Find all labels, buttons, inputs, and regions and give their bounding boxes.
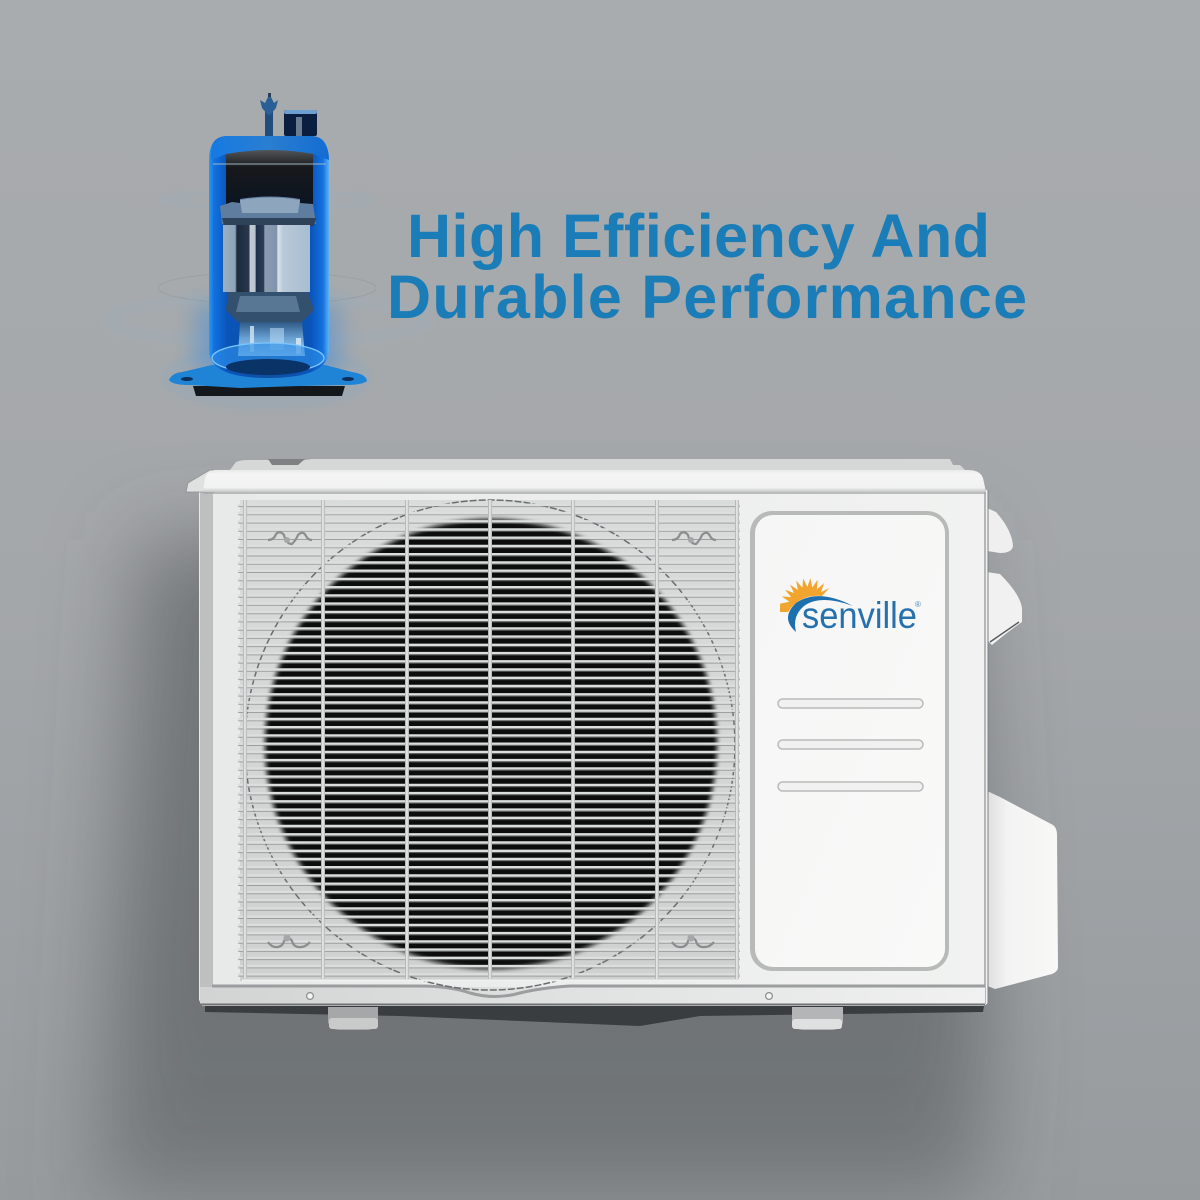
horizontal wires shading <box>238 507 740 976</box>
side bumps <box>987 508 1022 645</box>
lower rail <box>200 986 985 1004</box>
logo registered mark: ® <box>915 600 921 609</box>
service panel <box>750 511 949 971</box>
louvers <box>778 699 923 791</box>
fan grille <box>238 500 740 990</box>
compressor glow <box>107 192 427 403</box>
top cap band <box>211 136 329 160</box>
logo sun <box>780 578 829 612</box>
underside <box>205 1000 985 1026</box>
dark interior <box>226 149 313 211</box>
headline line 2: Durable Performance <box>387 263 1027 331</box>
top lip <box>230 459 965 470</box>
grille clips <box>268 532 716 947</box>
mounting foot right <box>792 1007 843 1030</box>
headline line 1: High Efficiency And <box>407 202 990 270</box>
logo swoosh <box>788 596 853 632</box>
horizontal wires <box>238 505 740 974</box>
motor lower section <box>226 292 314 322</box>
left clip <box>186 470 214 492</box>
rear block <box>985 790 1058 989</box>
pump section <box>238 322 305 356</box>
unit wall shadow <box>100 540 990 1200</box>
motor windings top <box>220 196 316 224</box>
fan opening <box>265 519 717 969</box>
vertical wires <box>243 500 739 979</box>
grille bottom bar <box>242 980 738 982</box>
cabinet body <box>199 490 988 1006</box>
bottom dome <box>212 343 324 373</box>
logo wordmark: senville <box>802 595 917 636</box>
outdoor air conditioner unit <box>186 459 1058 1030</box>
motor stator <box>223 225 310 292</box>
compressor illustration <box>107 93 427 403</box>
headline <box>387 202 1027 331</box>
dashed shroud ring <box>245 500 735 990</box>
senville logo <box>780 578 921 636</box>
compressor base plate <box>169 365 367 396</box>
top cap <box>203 470 986 492</box>
compressor shell <box>209 136 329 378</box>
compressor stem and cap <box>260 93 317 136</box>
mounting foot left <box>328 1007 378 1030</box>
grille plate <box>240 500 738 981</box>
